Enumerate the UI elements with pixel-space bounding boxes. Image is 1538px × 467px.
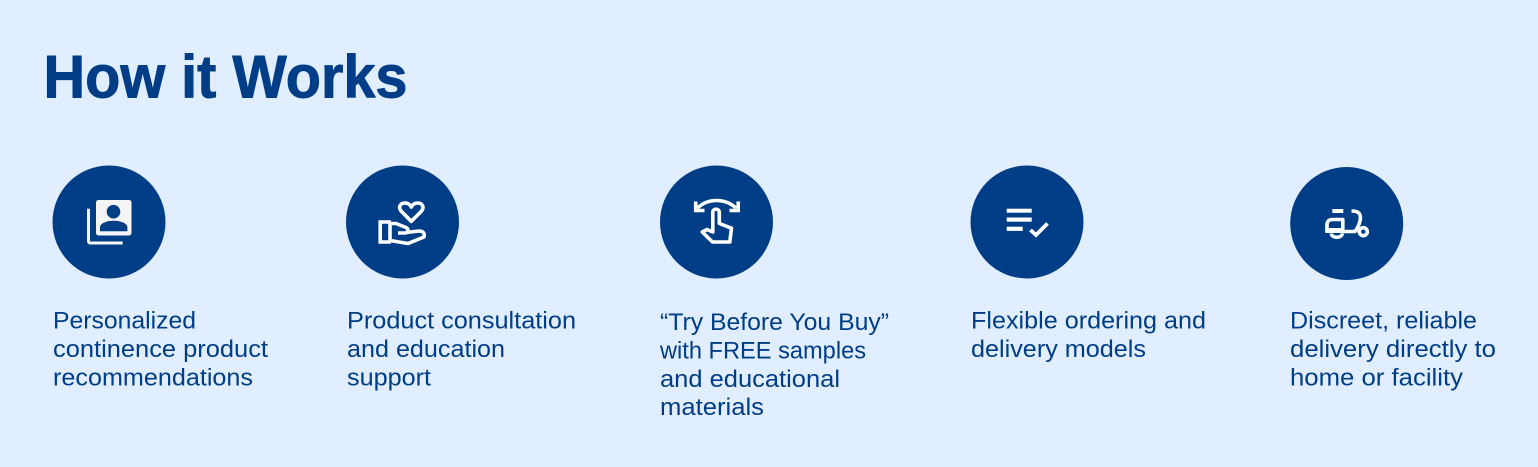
step 1: personalized recommendations [52, 166, 268, 392]
icon: checklist [970, 166, 1084, 278]
step 1 text: Personalized [53, 308, 196, 334]
step 2: product consultation [346, 166, 576, 392]
step 4 text [971, 308, 1206, 363]
step 2 text: support [347, 364, 431, 392]
step 4 text: Flexible ordering and [971, 308, 1206, 334]
step 3 text: and educational [660, 366, 840, 393]
step 1 text: continence product [53, 336, 268, 363]
step 3 text: with FREE samples [659, 338, 866, 364]
step 3: try before you buy [659, 166, 889, 421]
step 3 text: materials [660, 394, 764, 421]
step 5 text: Discreet, reliable [1290, 308, 1477, 334]
step 3 text [659, 309, 889, 421]
step 5 text: delivery directly to [1290, 336, 1496, 363]
step 3 text: “Try Before You Buy” [660, 309, 889, 336]
title: How it Works [44, 44, 408, 110]
icon: hand holding heart [346, 166, 459, 278]
step 2 text: Product consultation [347, 308, 576, 334]
icon: swipe finger [660, 166, 773, 278]
step 2 text: and education [347, 336, 505, 363]
step 2 text [347, 308, 576, 392]
icon: delivery scooter [1290, 167, 1403, 280]
step 4: flexible ordering [970, 166, 1206, 363]
step 1 text [53, 308, 268, 392]
step 5: discreet delivery [1290, 167, 1496, 392]
step 1 text: recommendations [53, 364, 253, 392]
icon: profile cards [52, 166, 166, 278]
step 5 text [1290, 308, 1496, 392]
step 5 text: home or facility [1290, 364, 1463, 392]
step 4 text: delivery models [971, 336, 1146, 363]
